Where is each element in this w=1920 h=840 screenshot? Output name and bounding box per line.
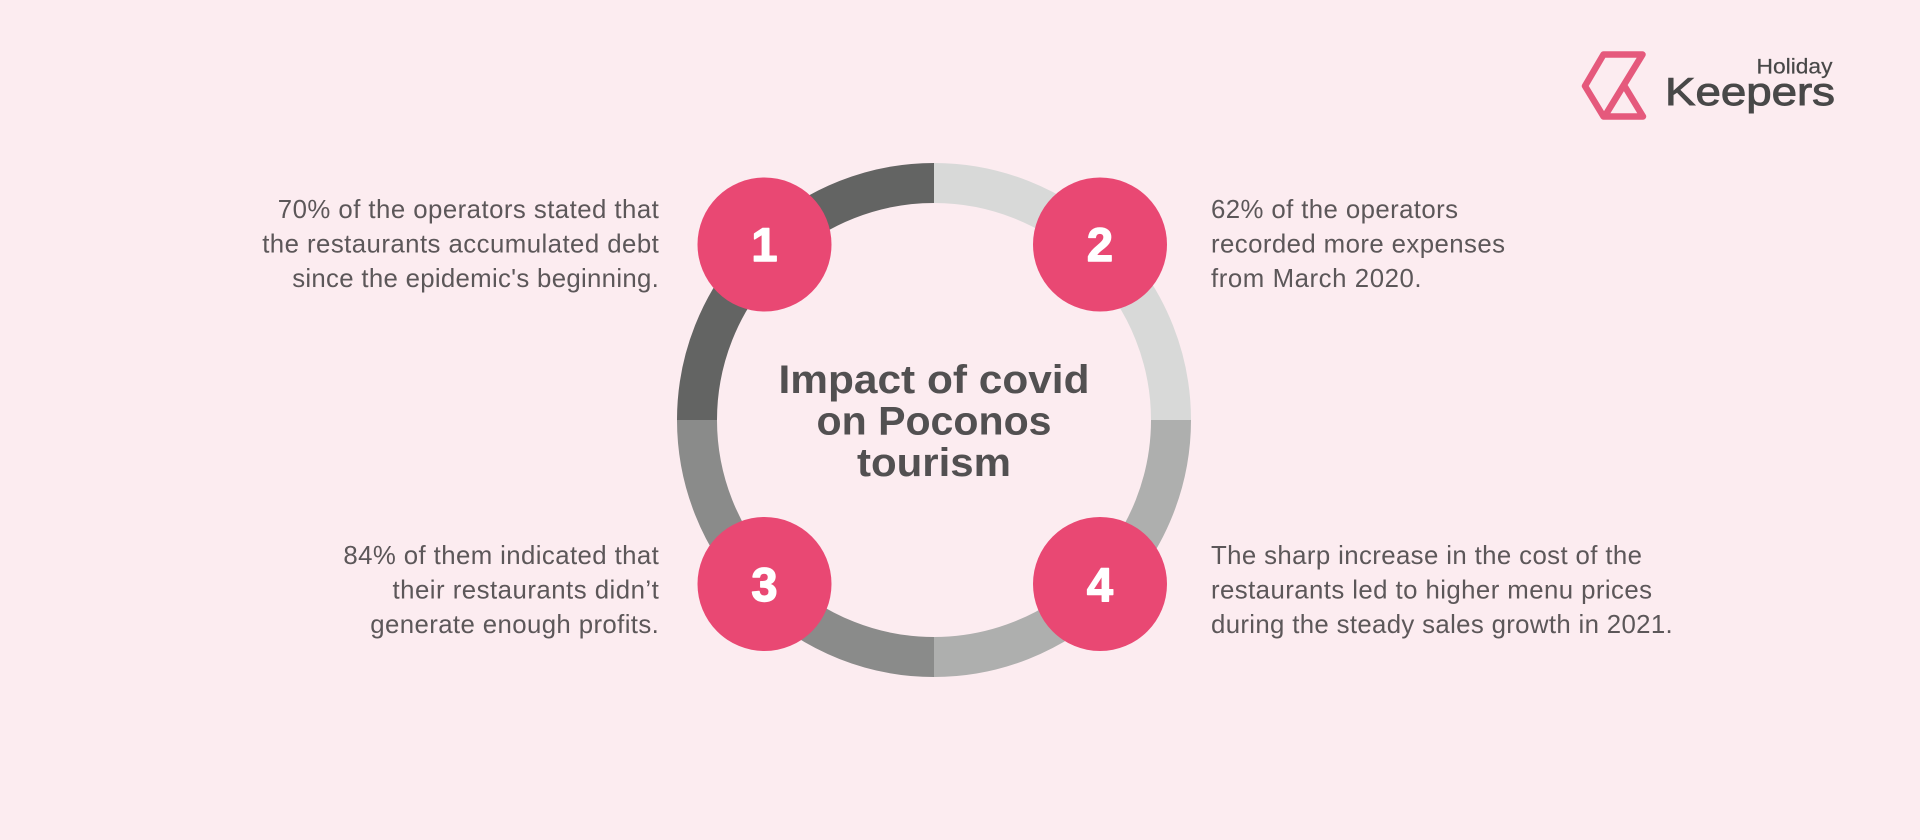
text block 2 — [1211, 196, 1505, 293]
text block 1: since the epidemic's beginning. — [292, 265, 659, 293]
badge 2: 2 — [1087, 218, 1113, 271]
badge 1: 1 — [751, 218, 778, 271]
title: on Poconos — [816, 400, 1052, 444]
text block 4: during the steady sales growth in 2021. — [1211, 611, 1673, 639]
segment 3 — [697, 420, 934, 657]
text block 3: 84% of them indicated that — [343, 542, 659, 570]
badge 2 — [1033, 178, 1167, 312]
text block 4: restaurants led to higher menu prices — [1211, 576, 1652, 604]
text block 4 — [1211, 542, 1673, 639]
badge 4 — [1033, 517, 1167, 651]
title: Impact of covid — [778, 358, 1090, 402]
logo: Holiday Keepers — [1585, 54, 1835, 116]
badge 4: 4 — [1087, 558, 1113, 611]
text block 4: The sharp increase in the cost of the — [1211, 542, 1642, 570]
title — [778, 358, 1090, 485]
badge 3: 3 — [751, 558, 778, 611]
title: tourism — [857, 441, 1011, 485]
text block 1: the restaurants accumulated debt — [262, 230, 659, 258]
badge 1 — [698, 178, 832, 312]
ring chart with four segments — [697, 183, 1171, 657]
text block 2: from March 2020. — [1211, 265, 1422, 293]
logo word: Holiday: Holiday — [1756, 55, 1833, 78]
icon: logo mark — [1585, 54, 1643, 116]
segment 2 — [934, 183, 1171, 420]
text block 3 — [343, 542, 659, 639]
text block 1: 70% of the operators stated that — [278, 196, 659, 224]
segment 4 — [934, 420, 1171, 657]
text block 1 — [262, 196, 659, 293]
text block 2: recorded more expenses — [1211, 230, 1505, 258]
text block 3: their restaurants didn’t — [392, 576, 659, 604]
badge 3 — [698, 517, 832, 651]
text block 3: generate enough profits. — [370, 611, 659, 639]
logo word: Keepers: Keepers — [1665, 71, 1835, 114]
segment 1 — [697, 183, 934, 420]
text block 2: 62% of the operators — [1211, 196, 1458, 224]
